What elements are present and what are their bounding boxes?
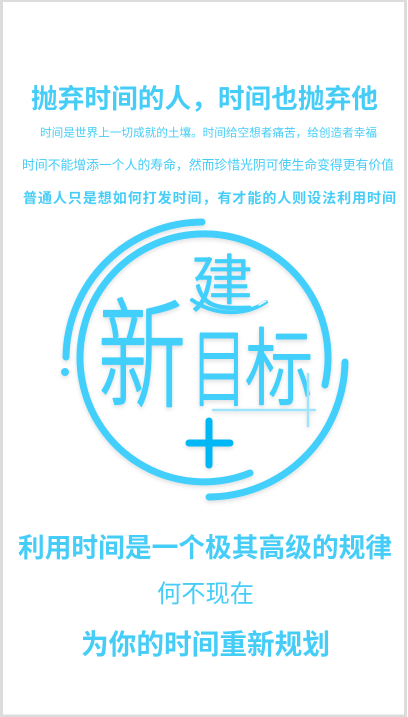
heading: advanced law: 利用时间是一个极其高级的规律 [18, 533, 392, 563]
outer arc bottom right [209, 362, 345, 497]
accent dot [61, 368, 69, 376]
lettering: new goal: 新 [98, 291, 186, 424]
outer arc top left [66, 222, 202, 357]
light cross accent [213, 374, 315, 426]
emblem: circle with lettering [61, 222, 345, 497]
subheading: why not now: 何不现在 [157, 581, 254, 608]
lettering: new goal: 目 [191, 323, 247, 418]
closing heading: 为你的时间重新规划 [81, 629, 330, 660]
inner ring [80, 234, 328, 482]
lettering: jian: 建 [191, 251, 253, 320]
title: 抛弃时间的人，时间也抛弃他 [31, 84, 378, 114]
icon: plus [189, 421, 230, 465]
lettering: new goal [98, 291, 313, 424]
text line: use time: 普通人只是想如何打发时间，有才能的人则设法利用时间 [23, 190, 396, 206]
text line: cherish time: 时间不能增添一个人的寿命，然而珍惜光阴可使生命变得更有价值 [22, 158, 394, 172]
jian sweeping tail [192, 300, 266, 312]
text line: soil of achievement: 时间是世界上一切成就的土壤。时间给空想者痛苦，给创造者幸福 [40, 126, 377, 140]
highlight marks [259, 301, 266, 305]
lettering: new goal: 标 [245, 323, 313, 417]
